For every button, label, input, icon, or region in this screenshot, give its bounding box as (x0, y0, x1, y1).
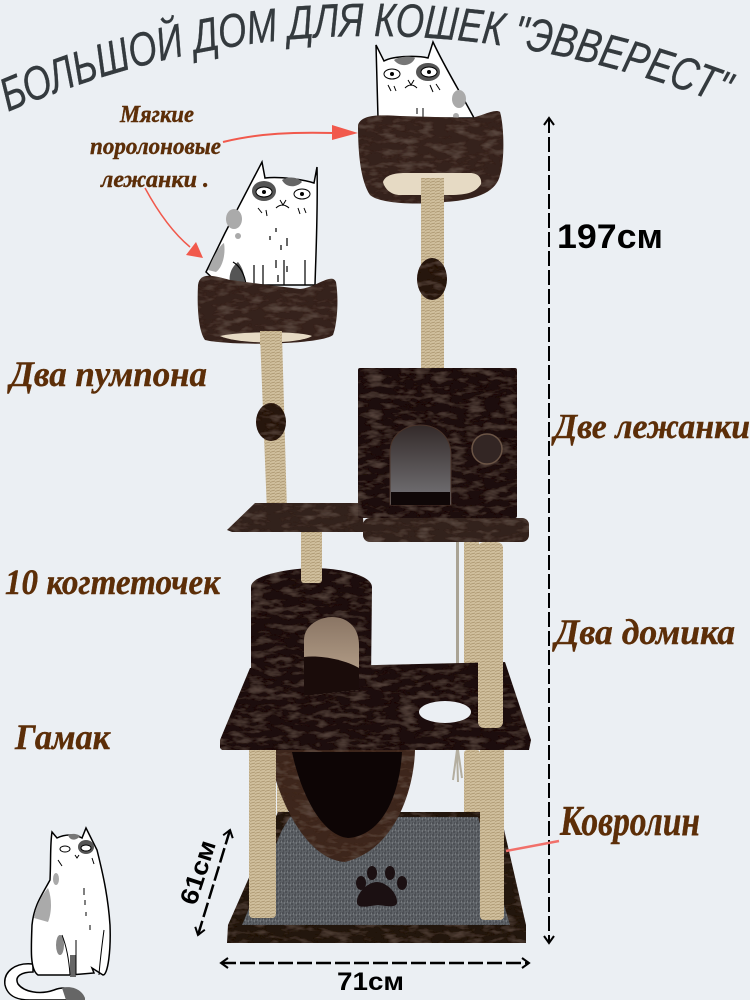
left shelf (227, 503, 364, 532)
upper house (358, 368, 517, 518)
arrow: to top bed (223, 125, 358, 142)
icon: paw (356, 866, 407, 907)
right shelf (363, 518, 529, 542)
label: two pompons: Два пумпона (7, 354, 207, 394)
label: carpet: Ковролин (559, 799, 700, 845)
height label: 197см (557, 218, 663, 256)
label: two houses: Два домика (552, 612, 735, 652)
pompon upper (417, 258, 447, 300)
hammock (268, 750, 415, 862)
bottom-left cat (5, 828, 110, 1000)
height dimension arrow (548, 118, 550, 943)
lower bed post (260, 335, 287, 512)
label: hammock: Гамак (14, 717, 111, 757)
label: soft beds: лежанки . (100, 167, 209, 193)
label: soft beds: поролоновые (90, 134, 221, 160)
cylinder house (251, 568, 372, 698)
front lower scratching posts (249, 745, 504, 920)
base platform (227, 812, 526, 943)
lower cat (206, 162, 317, 285)
width dimension arrow (221, 962, 529, 964)
depth label: 61см (175, 837, 222, 908)
large platform (220, 662, 531, 750)
lower bed (198, 276, 337, 345)
cat body (31, 828, 110, 975)
cat tail (5, 964, 84, 1000)
post above cylinder (301, 530, 322, 583)
top bed (358, 111, 503, 204)
arrow: to lower bed (145, 188, 203, 258)
label: soft beds: Мягкие (119, 102, 194, 128)
depth dimension arrow (198, 830, 230, 935)
label: soft beds (90, 102, 221, 193)
carpet pointer line (506, 841, 559, 851)
width label: 71см (337, 968, 404, 996)
pompon lower (256, 403, 286, 441)
back scratching posts (277, 542, 480, 833)
label: ten scratching posts: 10 когтеточек (5, 562, 221, 602)
upper post (421, 178, 444, 373)
hanging rope toy (453, 542, 462, 782)
top cat (376, 42, 474, 119)
cat tree (220, 178, 531, 943)
front upper scratching post (478, 542, 503, 728)
carpet with paw print (242, 817, 510, 925)
